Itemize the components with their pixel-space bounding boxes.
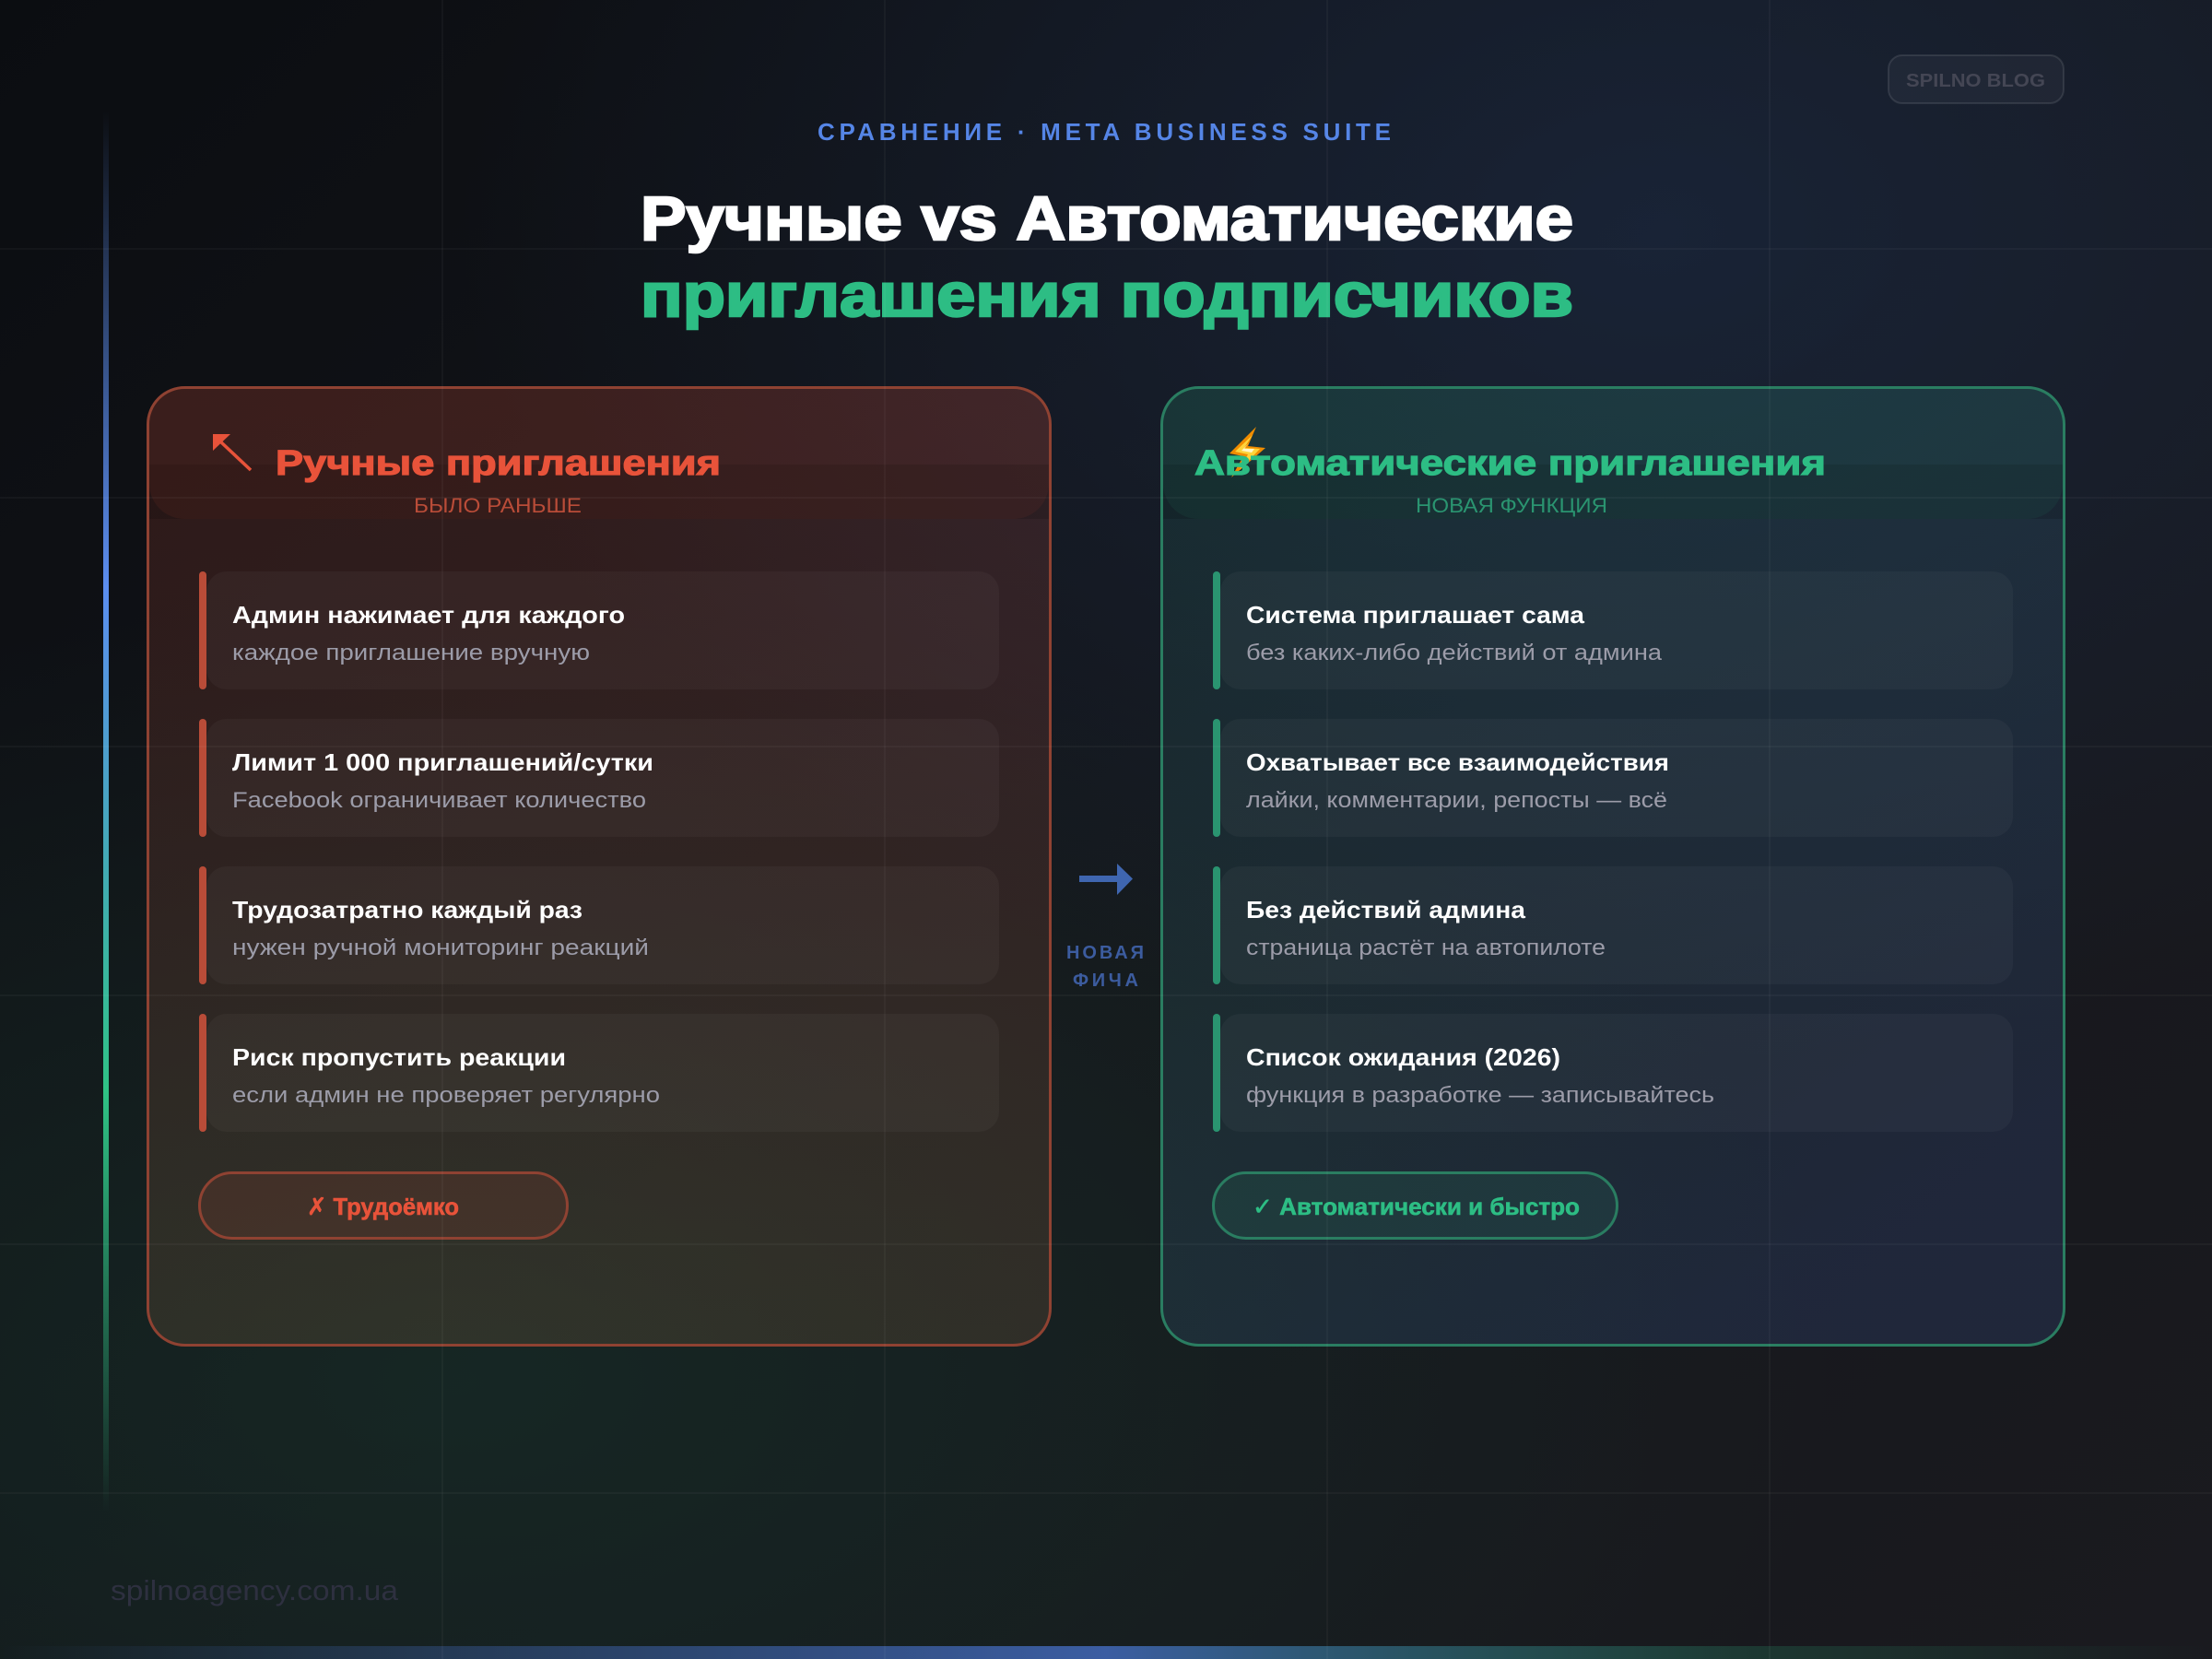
item: no admin action (1213, 866, 2013, 984)
arrow caption: ФИЧА (1073, 971, 1138, 991)
verdict pill: automatic (1213, 1172, 1617, 1239)
arrow caption: НОВАЯ (1066, 943, 1144, 963)
item: no admin action: страница растёт на автопилоте (1246, 935, 1606, 960)
automatic subheading: НОВАЯ ФУНКЦИЯ (1416, 494, 1607, 517)
item: system invites (1213, 571, 2013, 689)
item: daily limit: Лимит 1 000 приглашений/сутки (232, 748, 653, 776)
panel: manual invitations (147, 387, 1051, 1346)
title: Ручные vs Автоматические (641, 184, 1573, 253)
panel: automatic invitations (1161, 387, 2065, 1346)
icon: north-west arrow (213, 434, 251, 470)
verdict pill: manual (199, 1172, 568, 1239)
item: labor intensive (199, 866, 999, 984)
arrow: manual to automatic (1079, 864, 1133, 895)
item: admin clicks: Админ нажимает для каждого (232, 601, 625, 629)
item: all interactions: Охватывает все взаимодействия (1246, 748, 1669, 776)
footer site url: spilnoagency.com.ua (111, 1574, 399, 1606)
item: no admin action: Без действий админа (1246, 896, 1526, 924)
item: admin clicks (199, 571, 999, 689)
item: labor intensive: Трудозатратно каждый раз (232, 896, 582, 924)
brand badge (1888, 55, 2064, 103)
item: waitlist: функция в разработке — записывайтесь (1246, 1083, 1714, 1108)
manual heading: Ручные приглашения (276, 444, 721, 483)
panel header: manual (149, 389, 1049, 519)
bottom accent bar (0, 1646, 2212, 1659)
item: system invites: без каких-либо действий от админа (1246, 641, 1663, 665)
title (641, 184, 1573, 330)
panel header: automatic (1163, 389, 2063, 519)
item: waitlist: Список ожидания (2026) (1246, 1043, 1560, 1071)
verdict pill: manual: ✗ Трудоёмко (307, 1193, 459, 1220)
item: system invites: Система приглашает сама (1246, 601, 1585, 629)
arrow caption (1066, 943, 1144, 991)
eyebrow: СРАВНЕНИЕ · META BUSINESS SUITE (818, 118, 1391, 146)
automatic heading: Автоматические приглашения (1194, 444, 1826, 483)
item: all interactions: лайки, комментарии, репосты — всё (1246, 788, 1667, 813)
item: admin clicks: каждое приглашение вручную (232, 641, 590, 665)
item: daily limit (199, 719, 999, 837)
title: приглашения подписчиков (641, 261, 1573, 330)
item: missed reactions: если админ не проверяет регулярно (232, 1083, 660, 1108)
item: missed reactions (199, 1014, 999, 1132)
item: missed reactions: Риск пропустить реакции (232, 1043, 566, 1071)
verdict pill: automatic: ✓ Автоматически и быстро (1253, 1193, 1580, 1220)
item: labor intensive: нужен ручной мониторинг реакций (232, 935, 649, 960)
item: all interactions (1213, 719, 2013, 837)
icon: lightning bolt (1230, 427, 1265, 477)
left accent line (103, 111, 109, 1512)
item: waitlist (1213, 1014, 2013, 1132)
item: daily limit: Facebook ограничивает количество (232, 788, 646, 813)
manual subheading: БЫЛО РАНЬШЕ (414, 494, 582, 517)
brand badge: SPILNO BLOG (1906, 71, 2045, 91)
